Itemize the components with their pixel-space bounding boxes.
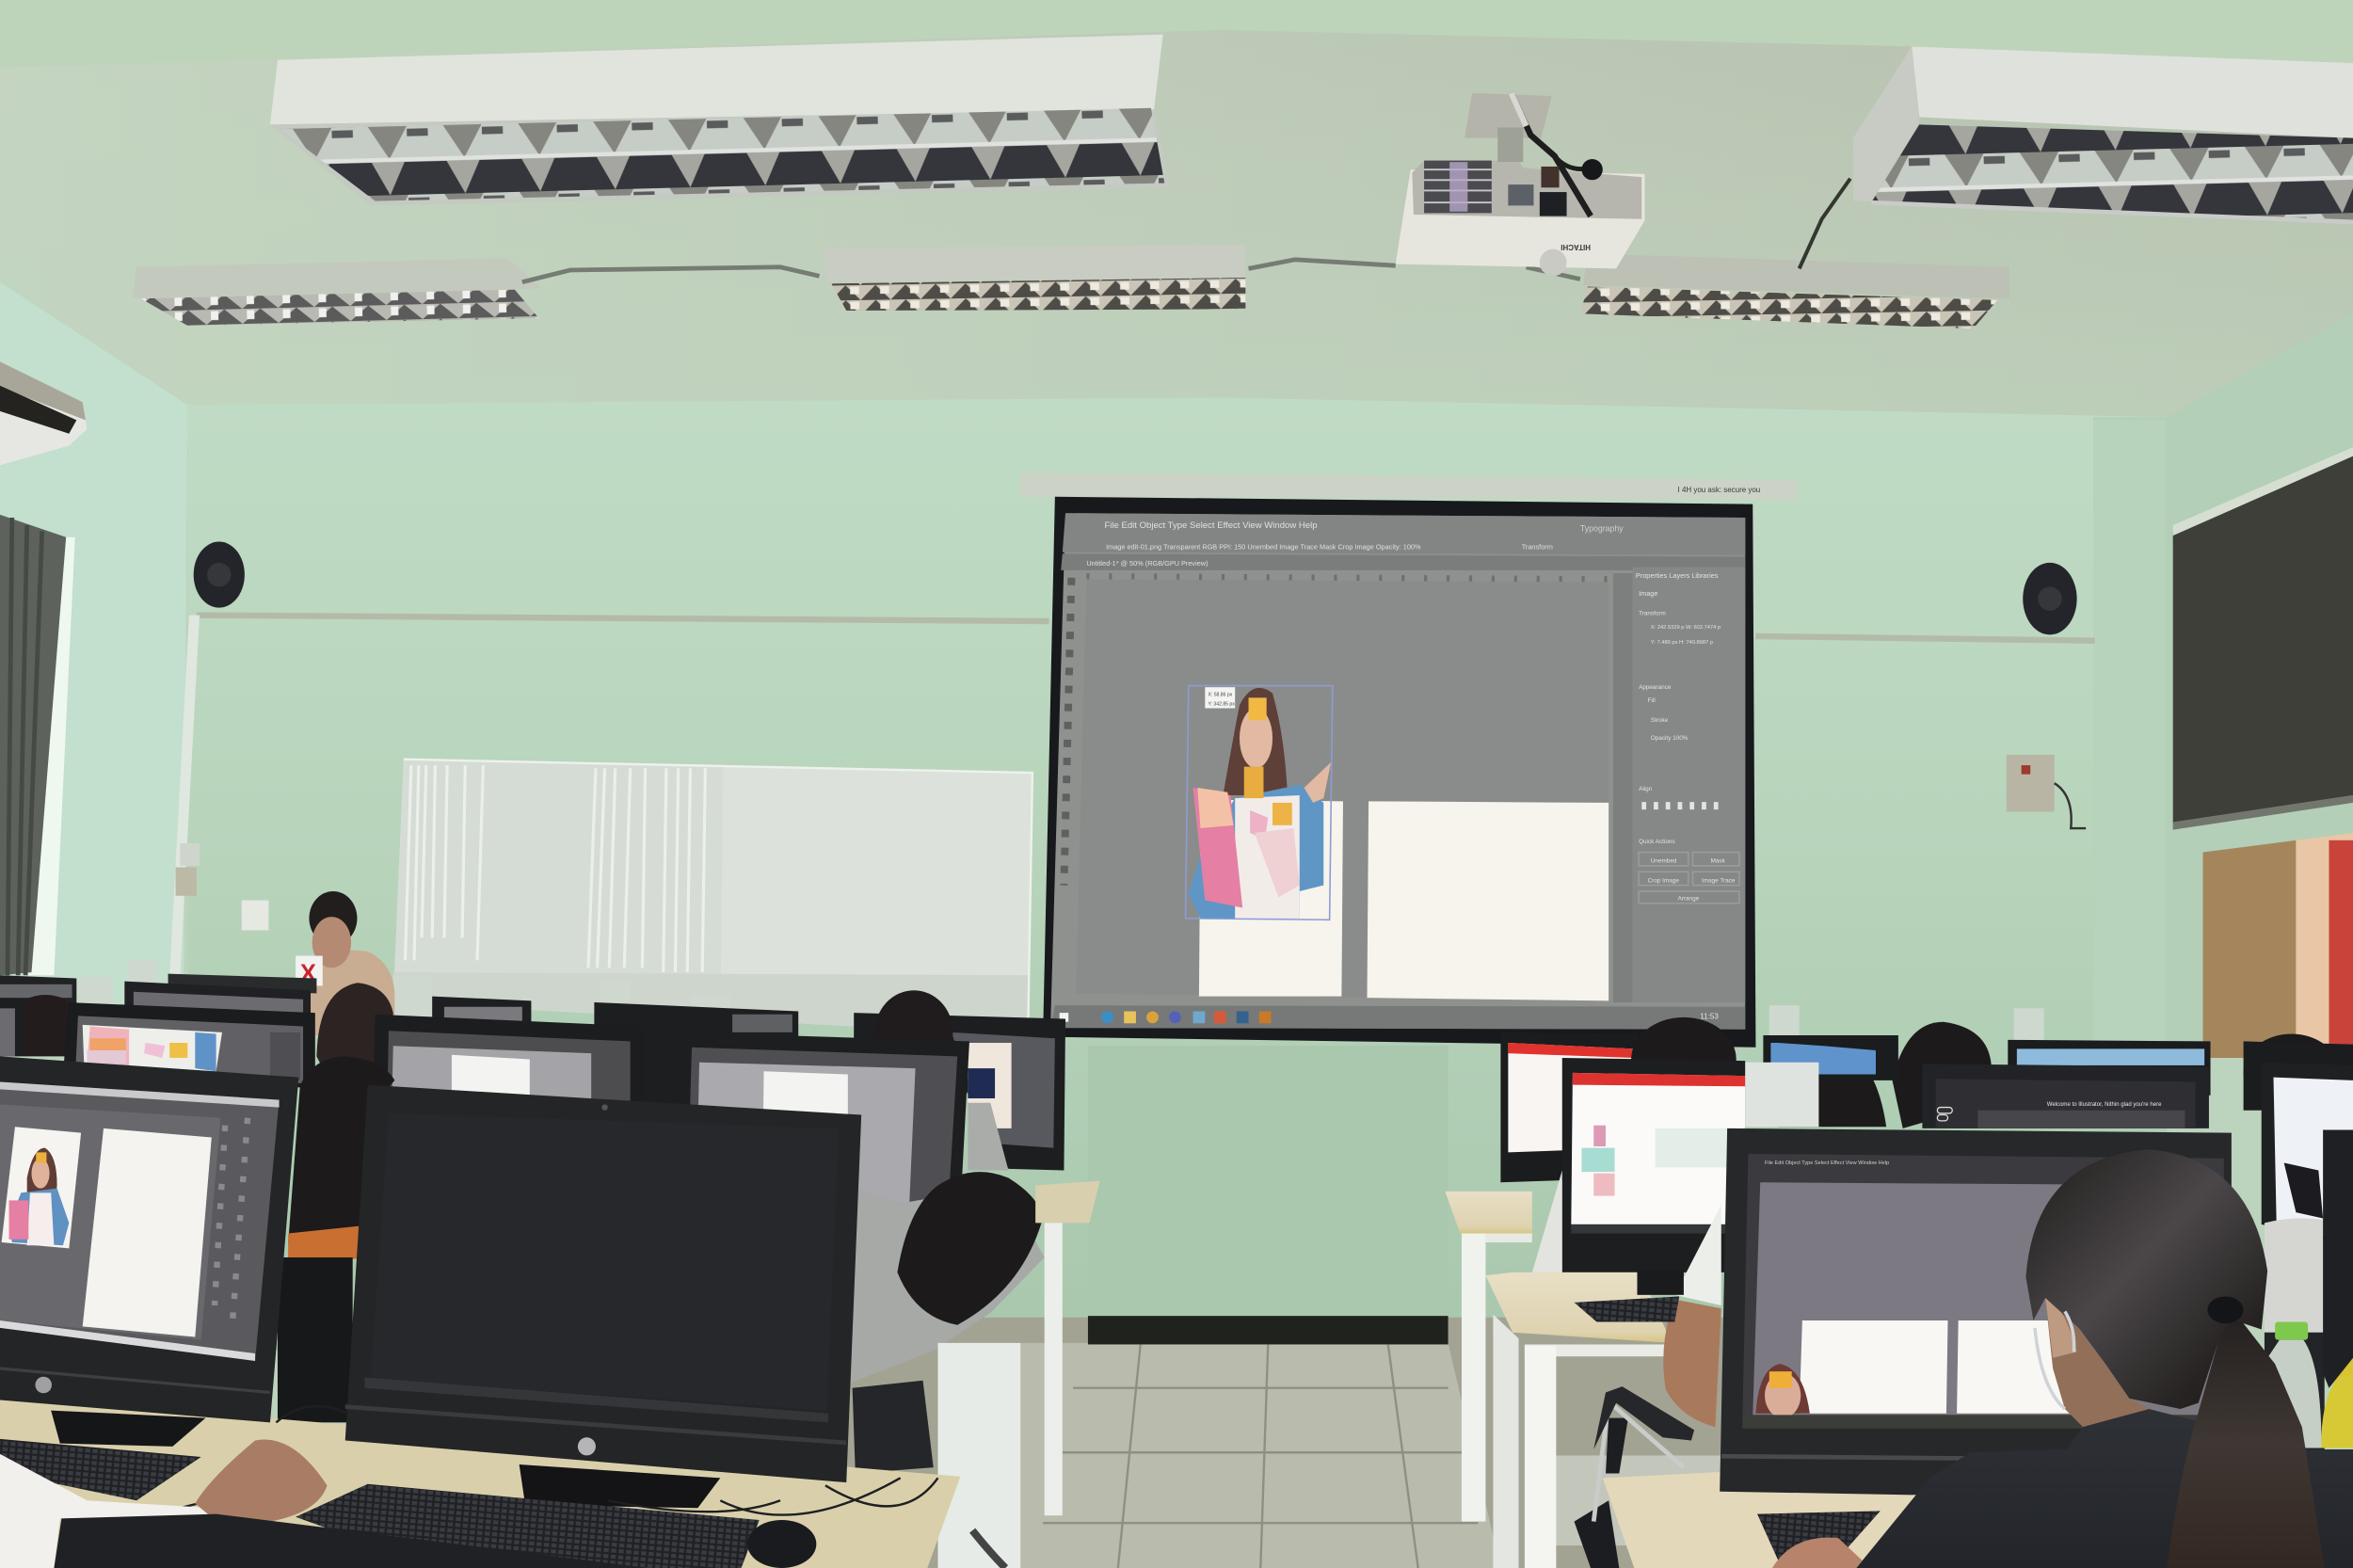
bracket and cables bbox=[1497, 128, 1523, 162]
right properties panel: X: 242.5329 p W: 602.7474 p bbox=[1651, 625, 1721, 631]
student heads behind right monitors bbox=[1631, 1017, 2340, 1128]
cable conduit floor bbox=[972, 1530, 1005, 1568]
ceiling bbox=[0, 0, 2353, 435]
left tool strip bbox=[1064, 578, 1071, 886]
right properties panel: Align bbox=[1639, 786, 1653, 792]
conduit pipe left bbox=[522, 267, 820, 282]
sleeping student bbox=[849, 1172, 1045, 1384]
head hair bbox=[2025, 1149, 2267, 1409]
HP logo bbox=[35, 1377, 52, 1393]
application menu bar: File Edit Object Type Select Effect View Window Help bbox=[1104, 520, 1318, 531]
application menu bar: Typography bbox=[1580, 523, 1624, 533]
conduit pipe right bbox=[1249, 260, 1580, 280]
wall column right bbox=[2093, 420, 2166, 1058]
yellow drink bottle bbox=[2321, 1355, 2353, 1448]
ceiling mount bbox=[1465, 93, 1552, 138]
ear bbox=[2045, 1298, 2077, 1358]
monitor powerpoint slide sorter bbox=[1562, 1058, 1818, 1272]
monitor foreground left bbox=[0, 1056, 298, 1422]
seated student arm and shirt bbox=[1532, 1171, 1721, 1427]
foreground student black shirt bbox=[1856, 1409, 2353, 1568]
right properties panel: Stroke bbox=[1651, 717, 1669, 724]
chrome frame bbox=[1593, 1401, 1684, 1522]
monitor dark welcome screen: Welcome to Illustrator, Nithin glad you're here bbox=[2047, 1102, 2162, 1108]
chair left of sleeping student bbox=[853, 1381, 934, 1474]
desk front right bbox=[1603, 1472, 1966, 1568]
cable to right light bbox=[1800, 179, 1850, 268]
foreground left desk bbox=[0, 1396, 960, 1568]
far desk bbox=[1445, 1192, 1532, 1233]
right edge monitor bbox=[2262, 1063, 2353, 1245]
small monitor at left edge with head bbox=[0, 995, 66, 1056]
back row monitors left bbox=[0, 974, 798, 1111]
application menu bar: Image edit-01.png Transparent RGB PPI: 150 Unembed Image Trace Mask Crop Image Opacity: 100% bbox=[1106, 542, 1421, 551]
wall control box bbox=[2007, 755, 2086, 828]
white artboard bbox=[83, 1128, 212, 1336]
monitor stand left bbox=[51, 1411, 205, 1447]
lower wall below screen bbox=[1088, 1046, 1449, 1316]
chair post bbox=[1606, 1418, 1628, 1474]
right properties panel: Image Trace bbox=[1702, 877, 1736, 884]
right properties panel: Unembed bbox=[1651, 858, 1677, 865]
right properties panel: Crop Image bbox=[1648, 877, 1679, 884]
right properties panel: Opacity 100% bbox=[1651, 735, 1689, 742]
right properties panel bbox=[1613, 568, 1745, 1002]
speaker right bbox=[2023, 563, 2077, 634]
paper privacy dividers back row bbox=[78, 960, 2044, 1041]
speaker left bbox=[194, 542, 245, 608]
right properties panel: Mask bbox=[1711, 858, 1726, 865]
vents bbox=[1424, 161, 1492, 213]
white artboard left bbox=[1199, 800, 1343, 997]
left wall bbox=[0, 282, 187, 1050]
right properties panel: Image bbox=[1639, 589, 1657, 598]
right properties panel: Appearance bbox=[1639, 684, 1672, 691]
right back row monitor powerpoint A bbox=[1500, 1032, 1637, 1182]
application menu bar: Untitled-1* @ 50% (RGB/GPU Preview) bbox=[1086, 559, 1209, 568]
floor and lower wall under desks bbox=[840, 1316, 1740, 1568]
wall trunking and switches bbox=[169, 616, 268, 975]
monitor: far centre with student bbox=[854, 990, 1065, 1171]
screen brand label: I 4H you ask: secure you bbox=[1678, 486, 1760, 494]
keyboard foreground left bbox=[0, 1439, 201, 1500]
monitor foreground right bbox=[1720, 1128, 2232, 1500]
properties panel marks bbox=[215, 1118, 248, 1320]
light fixture back right bbox=[1580, 253, 2009, 328]
arm pad bbox=[1593, 1386, 1694, 1449]
monitor foreground centre, off bbox=[345, 1085, 861, 1508]
right wall bbox=[2093, 313, 2353, 1058]
instructor bbox=[293, 891, 394, 1035]
taskbar bbox=[1050, 1005, 1745, 1030]
light fixture back left bbox=[132, 258, 542, 326]
water bottle bbox=[2267, 1322, 2322, 1448]
application menu bar bbox=[1061, 513, 1745, 570]
woman with sticky notes image bbox=[1186, 686, 1333, 920]
monitor stand bbox=[1637, 1271, 1684, 1295]
monitor: second row artboard A bbox=[372, 1015, 644, 1111]
office chair bbox=[1575, 1386, 1694, 1568]
near desk bbox=[1485, 1272, 1672, 1343]
back row monitors right bbox=[1763, 1035, 2353, 1111]
light fixture back centre bbox=[824, 245, 1245, 311]
monitor: colorful image bbox=[63, 1002, 315, 1088]
right properties panel: Properties Layers Libraries bbox=[1636, 571, 1719, 580]
back wall bbox=[187, 397, 2167, 1351]
right properties panel: Transform bbox=[1639, 611, 1666, 617]
chair seat bbox=[1575, 1500, 1619, 1568]
right properties panel: Fill bbox=[1648, 697, 1656, 704]
light fixture front right bbox=[1853, 46, 2353, 222]
desk right row bbox=[1445, 1192, 1672, 1568]
monitor far right edge bbox=[2323, 1129, 2353, 1388]
keyboard foreground right bbox=[1757, 1511, 1881, 1565]
window reflection stripes bbox=[405, 765, 705, 972]
white artboard right bbox=[1367, 801, 1609, 1000]
woman with sticky notes image: Y: 342.85 px bbox=[1208, 701, 1235, 707]
desk right of sleeping student bbox=[937, 1181, 1100, 1568]
grey shirt at right bbox=[2265, 1218, 2323, 1333]
student with long hair and orange top bbox=[278, 1056, 394, 1422]
right properties panel: Arrange bbox=[1678, 896, 1700, 903]
taskbar: 11:53 bbox=[1700, 1013, 1719, 1021]
chair behind bottles bbox=[2265, 1333, 2325, 1449]
projector: HITACHI bbox=[1561, 243, 1591, 251]
projector bbox=[1396, 93, 1644, 276]
wall rail bbox=[197, 616, 2095, 641]
mask strap and mask edge bbox=[2035, 1311, 2074, 1409]
whiteboard bbox=[393, 760, 1032, 1035]
foreground student arm and hand bbox=[0, 1439, 328, 1568]
projector screen housing bbox=[1020, 472, 1796, 500]
hair tie bbox=[2207, 1296, 2244, 1323]
canvas area bbox=[1076, 579, 1609, 1000]
neck bbox=[2045, 1298, 2149, 1427]
cables bbox=[150, 1406, 937, 1515]
blackout curtain bbox=[2173, 447, 2353, 830]
window curtain bbox=[0, 515, 75, 975]
keyboard right row bbox=[1575, 1296, 1679, 1322]
monitor dark welcome screen bbox=[1922, 1064, 2209, 1128]
placed photo bbox=[2, 1127, 81, 1248]
ruler bbox=[1086, 576, 1609, 579]
mouse bbox=[747, 1520, 816, 1568]
monitor: second row artboard B bbox=[679, 1032, 969, 1208]
right properties panel: Y: 7.489 px H: 740.8987 p bbox=[1651, 640, 1713, 646]
foreground chair back bbox=[54, 1514, 648, 1568]
student head behind colorful monitor bbox=[316, 983, 393, 1068]
light fixture front left bbox=[270, 35, 1171, 205]
keyboard foreground centre bbox=[296, 1484, 760, 1568]
monitor foreground right: File Edit Object Type Select Effect View Window Help bbox=[1765, 1160, 1889, 1166]
foreground student head and ponytail bbox=[2025, 1149, 2325, 1568]
right properties panel: Quick Actions bbox=[1639, 839, 1675, 845]
projector screen bbox=[1043, 497, 1755, 1048]
woman with sticky notes image: X: 58.86 px bbox=[1208, 693, 1233, 698]
application menu bar: Transform bbox=[1522, 542, 1553, 551]
hand on keyboard bbox=[1772, 1538, 1863, 1568]
ponytail bbox=[2167, 1321, 2325, 1568]
doorway bbox=[2203, 833, 2353, 1058]
instructor: X bbox=[300, 961, 316, 987]
projector body bbox=[1396, 169, 1644, 268]
air conditioner bbox=[0, 361, 87, 465]
